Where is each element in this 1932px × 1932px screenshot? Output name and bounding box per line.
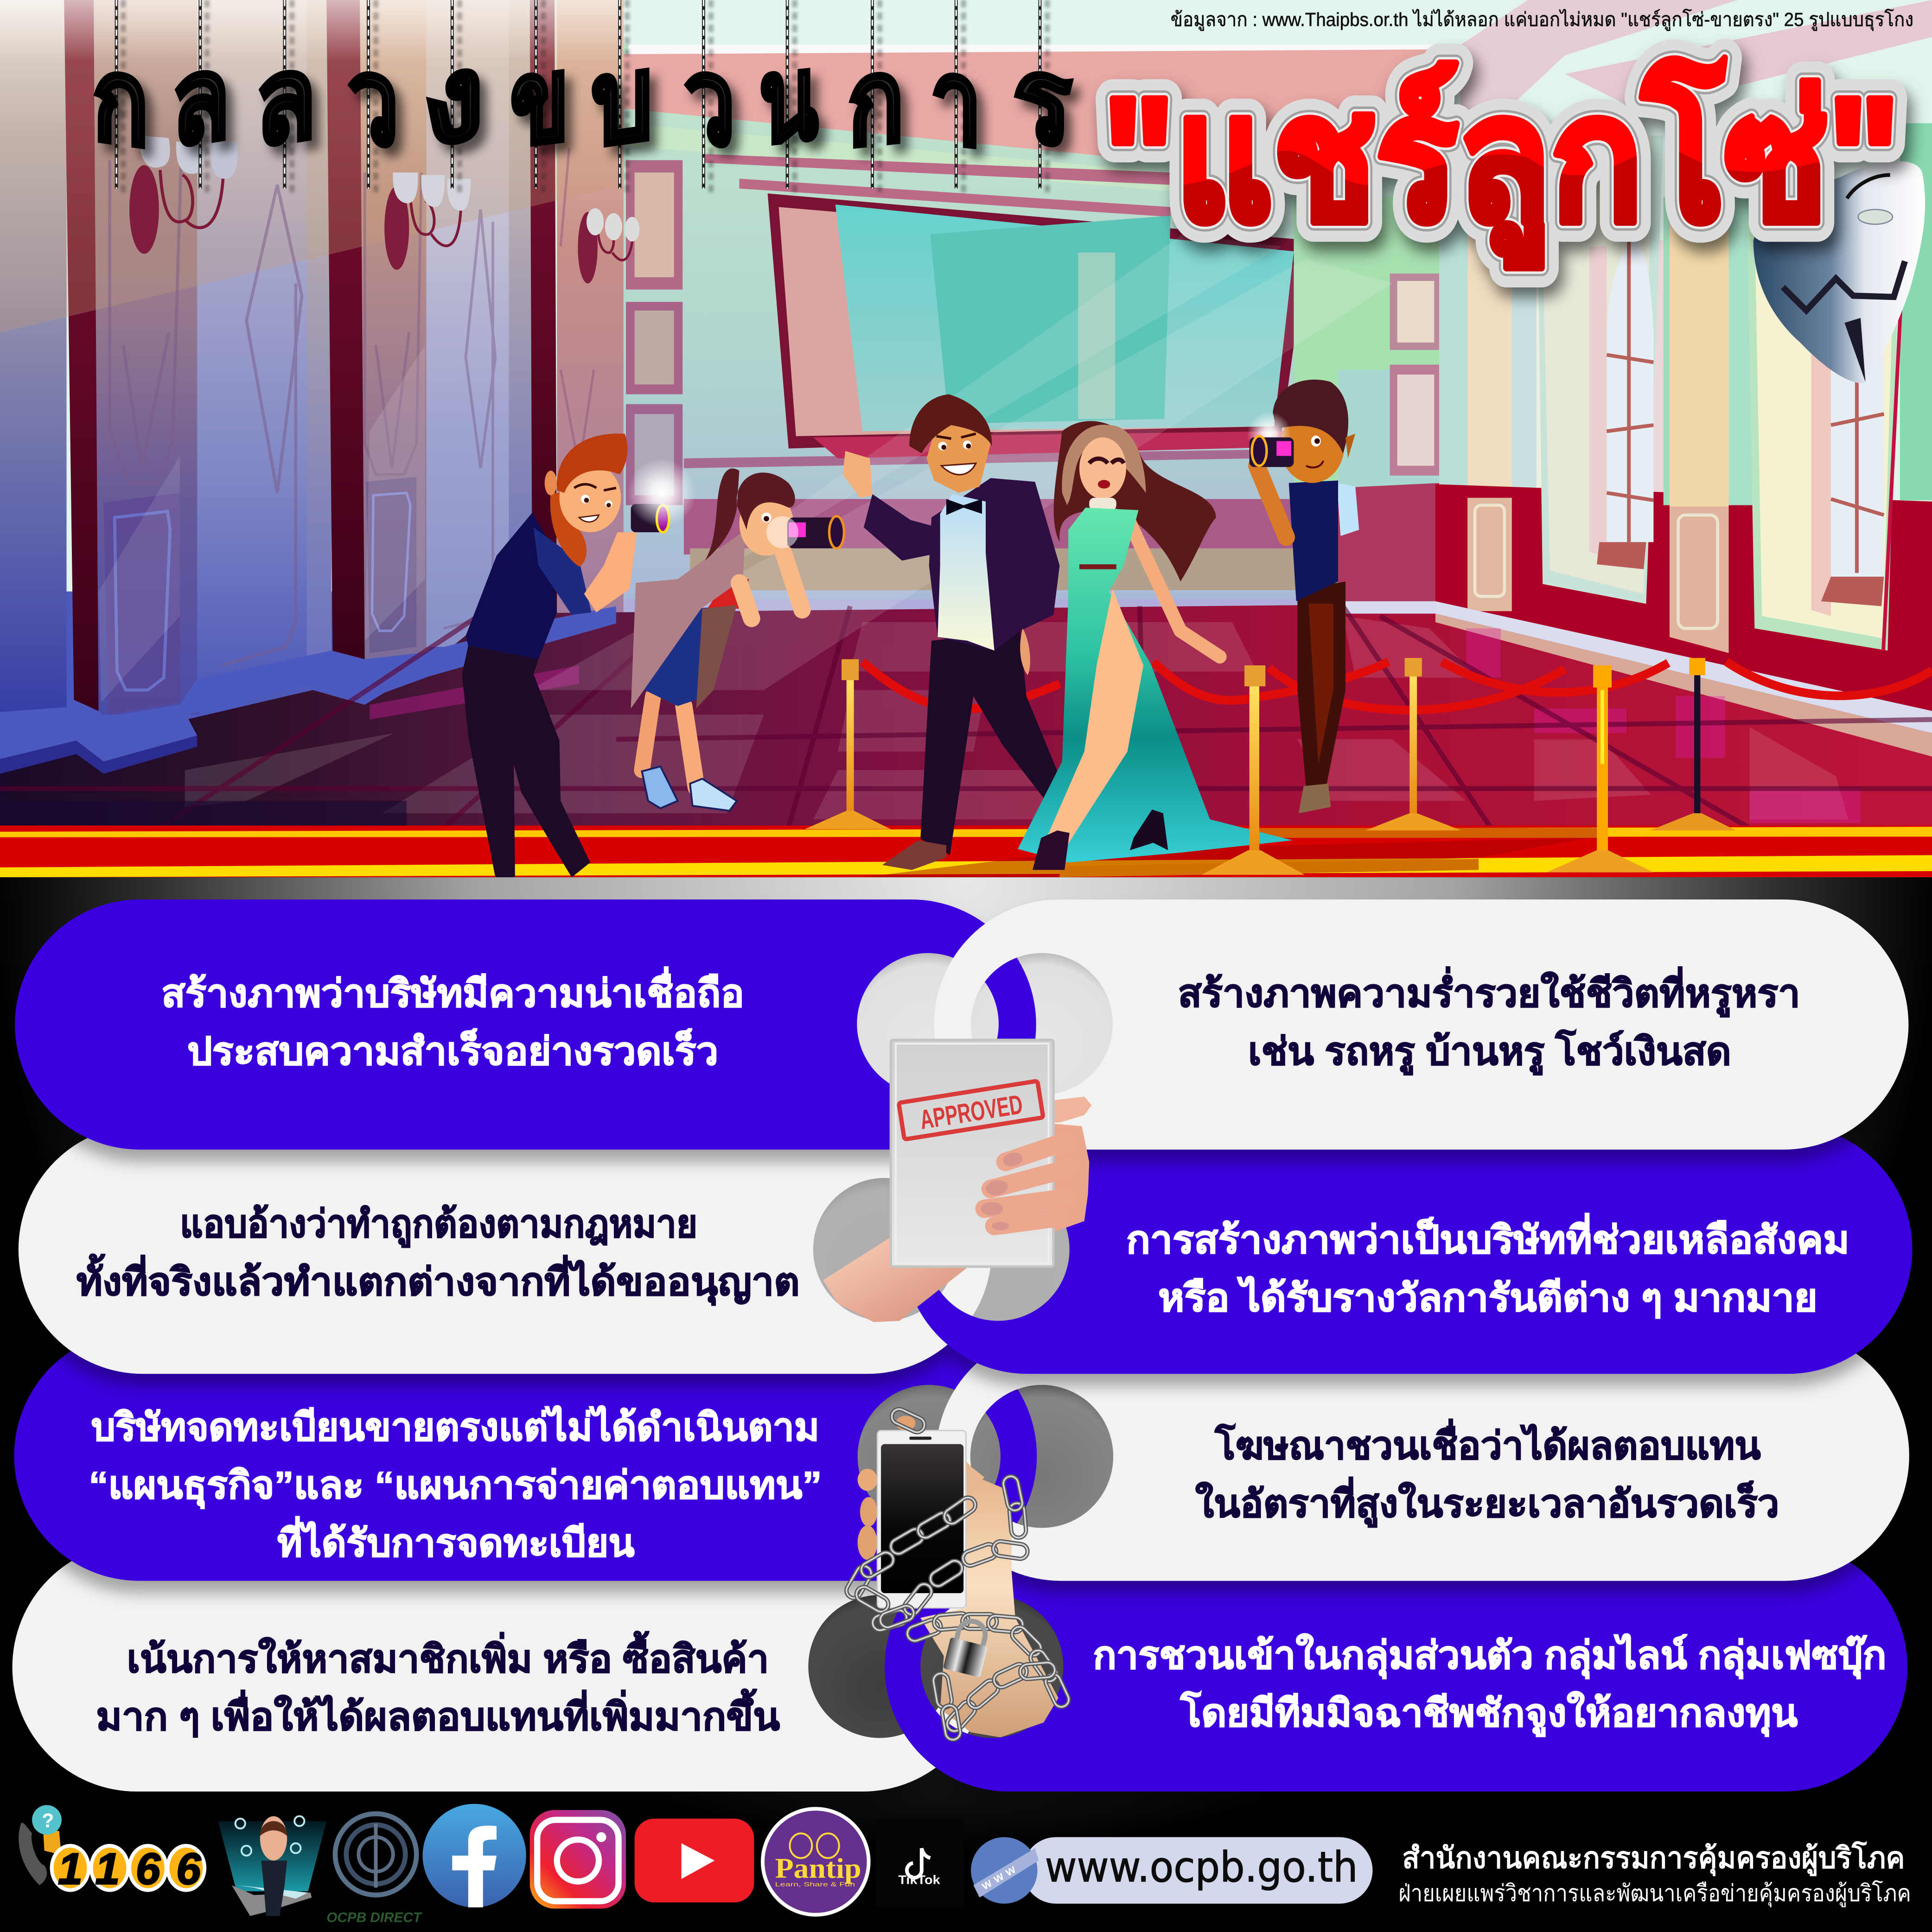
- text: row 3 left: [89, 1406, 822, 1564]
- icon: Pantip: [763, 1809, 869, 1915]
- photographer left: [462, 434, 696, 877]
- panel: row 3 right white pill: [936, 1331, 1909, 1581]
- icon: OCPB mascot in spotlight: [218, 1816, 326, 1916]
- icon: YouTube: [635, 1819, 754, 1902]
- stamp: approved: APPROVED: [918, 1089, 1025, 1135]
- text: row 3 right: [1195, 1419, 1779, 1527]
- text: row 2 right: การสร้างภาพว่าเป็นบริษัทที่ช่วยเหลือสังคม: [1126, 1213, 1849, 1262]
- text: row 4 left: เน้นการให้หาสมาชิกเพิ่ม หรือ ซื้อสินค้า: [127, 1631, 769, 1680]
- hole: row 2 right: [926, 1178, 1070, 1321]
- icon: hand holding approved document: [823, 1040, 1092, 1322]
- website badge: [971, 1837, 1372, 1904]
- title: กลลวงขบวนการ: ร: [1013, 32, 1072, 171]
- floor: [0, 601, 1932, 828]
- title: กลลวงขบวนการ: ก: [848, 32, 905, 171]
- title: กลลวงขบวนการ: ล: [171, 30, 230, 171]
- panel: row 3 left purple pill: [14, 1331, 1037, 1581]
- title: กลลวงขบวนการ: ง: [423, 29, 484, 171]
- front stanchion: [1201, 665, 1305, 875]
- title: กลลวงขบวนการ: ว: [684, 32, 736, 172]
- light rays: [530, 234, 1392, 690]
- right wall and windows: [1294, 123, 1932, 712]
- red rope and rear stanchions: [804, 658, 1932, 873]
- icon: globe: [971, 1837, 1039, 1904]
- text: row 2 left: ทั้งที่จริงแล้วทำแตกต่างจากที่ได้ขออนุญาต: [77, 1254, 800, 1306]
- organisation name: [1398, 1840, 1911, 1907]
- text: row 2 left: แอบอ้างว่าทำถูกต้องตามกฎหมาย: [180, 1203, 697, 1248]
- text: row 1 left: ประสบความสำเร็จอย่างรวดเร็ว: [187, 1028, 718, 1073]
- row 3 pills: [14, 1331, 1909, 1581]
- hole: row 2 left: [813, 1178, 956, 1321]
- text: row 3 right: โฆษณาชวนเชื่อว่าได้ผลตอบแทน: [1214, 1419, 1761, 1467]
- text: row 3 right: ในอัตราที่สูงในระยะเวลาอันรวดเร็ว: [1195, 1476, 1779, 1527]
- hanging chains: [116, 0, 1047, 195]
- icon: Pantip: Learn, Share & Fun: [775, 1881, 855, 1888]
- hole: row 4 left: [808, 1595, 951, 1738]
- back wall: [493, 0, 1932, 616]
- icon: Instagram: [530, 1810, 626, 1909]
- icon: globe: www: [978, 1862, 1018, 1893]
- row 4 pills: [13, 1543, 1907, 1792]
- photographer right: [1247, 380, 1359, 813]
- icon: chained hand holding phone: [844, 1407, 1071, 1741]
- text: row 4 right: การชวนเข้าในกลุ่มส่วนตัว กลุ่มไลน์ กลุ่มเฟซบุ๊ก: [1093, 1633, 1887, 1679]
- row 2 pills: [19, 1125, 1912, 1374]
- footer: hotline 1166: [19, 1805, 204, 1894]
- icon: phone with chat bubbles: ?: [42, 1810, 54, 1832]
- text: row 4 left: [96, 1631, 780, 1738]
- title: กลลวงขบวนการ: ว: [347, 32, 399, 172]
- icon: TikTok: [876, 1820, 963, 1907]
- hole: row 3 left: [858, 1385, 1001, 1528]
- lower section background: [0, 877, 1932, 1932]
- title: กลลวงขบวนการ: ล: [255, 29, 317, 171]
- text: row 1 right: สร้างภาพความร่ำรวยใช้ชีวิตที่หรูหรา: [1178, 966, 1800, 1017]
- text: row 1 left: สร้างภาพว่าบริษัทมีความน่าเชื่อถือ: [161, 966, 744, 1015]
- panel: row 2 left white pill: [19, 1125, 992, 1374]
- hole: row 4 right: [920, 1595, 1063, 1738]
- title: กลลวงขบวนการ: น: [759, 30, 818, 168]
- text: row 3 left: บริษัทจดทะเบียนขายตรงแต่ไม่ได้ดำเนินตาม: [91, 1406, 819, 1449]
- footer: hotline 1166: 1166: [58, 1844, 201, 1894]
- title: กลลวงขบวนการ: บ: [592, 30, 653, 171]
- title: กลลวงขบวนการ: ข: [510, 32, 569, 171]
- woman in green gown: [1018, 421, 1293, 870]
- icon: Pantip: Pantip: [775, 1853, 861, 1884]
- organisation name: สำนักงานคณะกรรมการคุ้มครองผู้บริโภค: [1402, 1840, 1905, 1876]
- panel: row 4 left white pill: [13, 1543, 987, 1792]
- wall sconces: [129, 135, 639, 283]
- icon: phone with chat bubbles: [19, 1805, 62, 1885]
- text: row 4 right: [1093, 1633, 1887, 1737]
- panel: row 4 right purple pill: [885, 1543, 1907, 1792]
- mirror: [768, 193, 1294, 459]
- mask: [1753, 161, 1925, 383]
- title: กลลวงขบวนการ: [92, 29, 1072, 172]
- icon: TikTok: TikTok: [898, 1873, 940, 1887]
- text: OCPB DIRECT: OCPB DIRECT: [326, 1911, 422, 1926]
- hole: row 1 right: [971, 953, 1113, 1095]
- chain: [844, 1407, 1071, 1741]
- illustration: ballroom scene: [0, 0, 1932, 877]
- text: row 1 right: เช่น รถหรู บ้านหรู โชว์เงินสด: [1248, 1029, 1731, 1075]
- title: กลลวงขบวนการ: ก: [92, 32, 149, 172]
- hole: row 1 left: [857, 953, 999, 1095]
- panel: row 2 right purple pill: [903, 1125, 1912, 1374]
- text: row 2 left: [77, 1203, 800, 1306]
- text: row 4 left: มาก ๆ เพื่อให้ได้ผลตอบแทนที่เพิ่มมากขึ้น: [96, 1689, 780, 1738]
- padlock: [943, 1617, 993, 1677]
- left wall: [0, 0, 624, 764]
- icon: OCPB logo: [326, 1814, 422, 1926]
- text: row 1 left: [161, 966, 744, 1073]
- title: กลลวงขบวนการ: า: [930, 34, 982, 172]
- panel: row 1 right white pill: [934, 899, 1908, 1149]
- stamp: approved: [899, 1081, 1043, 1139]
- hole: row 3 right: [970, 1385, 1113, 1528]
- red carpet: [0, 826, 1932, 877]
- text: row 4 right: โดยมีทีมมิจฉาชีพชักจูงให้อยากลงทุน: [1180, 1691, 1798, 1737]
- row 1 pills: [15, 899, 1908, 1149]
- text: row 2 right: [1126, 1213, 1849, 1320]
- man in tuxedo: [843, 394, 1059, 870]
- panel: row 1 left purple pill: [15, 899, 1036, 1149]
- icon: Facebook: [423, 1804, 526, 1907]
- text: row 3 left: ที่ได้รับการจดทะเบียน: [277, 1516, 635, 1564]
- photographer girl: [631, 468, 844, 811]
- text: website: www.ocpb.go.th: [1045, 1843, 1358, 1892]
- background glow: [0, 877, 1932, 1932]
- text: row 1 right: [1178, 966, 1800, 1075]
- text: row 3 left: “แผนธุรกิจ”และ “แผนการจ่ายค่าตอบแทน”: [89, 1464, 822, 1509]
- text: row 2 right: หรือ ได้รับรางวัลการันตีต่าง ๆ มากมาย: [1158, 1276, 1817, 1320]
